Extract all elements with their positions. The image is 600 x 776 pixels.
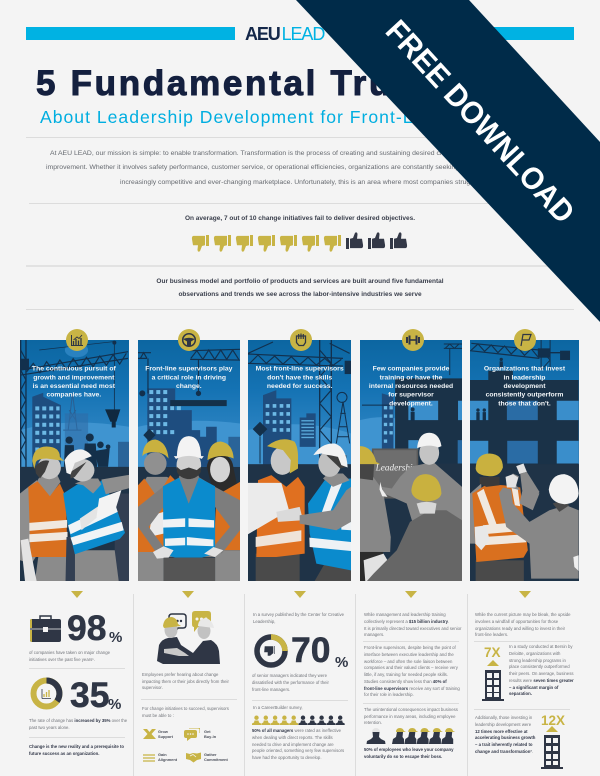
text: 50 percent managers: 50% of all managers were rated as ineffective: [252, 728, 341, 733]
panel 3 caption: don't have the skills: [267, 374, 332, 381]
text: fifteen billion industry: collectively represent a $15 billion industry.: [364, 619, 449, 624]
icon: raised hand badge: [290, 329, 312, 351]
text: upside: involves a windfall of opportunities for those: [475, 619, 558, 624]
text: 50 percent employees: voluntarily do so to escape their boss.: [364, 754, 442, 759]
logo bar: AEU LEAD: [245, 24, 324, 44]
panel 3 caption: Most front-line supervisors: [256, 366, 344, 373]
text: bersin by deloitte: results were seven times greater: [509, 678, 574, 683]
icon: steering wheel badge: [178, 329, 200, 351]
text: 50 percent managers: when dealing with direct reports. The skills: [252, 735, 333, 740]
text: rate of change: past two years alone.: [29, 725, 70, 730]
text: employees prefer: [142, 672, 229, 690]
label: gather commitment: [204, 752, 228, 762]
panel 4 caption: [369, 366, 453, 407]
text: 50 percent managers: people oriented, something very few supervisors: [252, 748, 344, 753]
panel 1 caption: growth and improvement: [33, 374, 115, 381]
text: unintentional consequences: retention.: [364, 720, 382, 725]
text: bersin by deloitte: [509, 644, 574, 698]
text: unintentional consequences: The unintentional consequences impact business: [364, 707, 458, 712]
label: gain alignment: [158, 752, 177, 762]
text: fifteen billion industry: [364, 612, 462, 637]
icon: briefcase: [30, 615, 61, 642]
panel 3: skills needed: [248, 340, 351, 581]
text: senior managers: of senior managers indicated they were: [252, 673, 327, 678]
panel 5 caption: consistently outperform: [486, 392, 563, 399]
icon row: employees leaving: [366, 727, 460, 745]
intro paragraph: At AEU LEAD, our mission is simple: to enable transformation. Transformation is the process of creating and sustaining desired change for continuous: [50, 150, 504, 157]
text: senior managers: [252, 673, 329, 692]
text: companies change: [29, 650, 110, 662]
text: new reality: [29, 744, 124, 756]
text: bersin by deloitte: Deloitte, organizations with: [509, 651, 560, 656]
title: 5 Fundamental Truths: [36, 64, 454, 103]
panel 1 caption: is an essential need most: [33, 383, 116, 390]
ribbon text: FREE DOWNLOAD: [379, 13, 582, 230]
text: front-line supervisors: interface between executive leadership and the: [364, 652, 454, 657]
label: get buy-in: Buy-In: [204, 734, 216, 739]
stat: twelve times with building: [538, 714, 564, 770]
text: employees prefer: impacting them or their jobs directly from their: [142, 679, 229, 684]
panel 5 caption: [484, 366, 566, 407]
text: senior managers: dissatisfied with the performance of their: [252, 680, 329, 685]
panel 1 caption: [32, 366, 116, 399]
business model statement: Our business model and portfolio of products and services are built around five fundamental: [156, 278, 444, 284]
chart: donut 35 percent: [30, 678, 62, 710]
panel 3 caption: [256, 366, 344, 390]
icon: gain alignment: [143, 754, 155, 762]
panel 4 caption: internal resources needed: [369, 383, 453, 390]
label: gather commitment: Commitment: [204, 757, 228, 762]
icon: dumbbell badge: [402, 329, 424, 351]
text: careerbuilder: In a CareerBuilder survey,: [253, 705, 303, 710]
stat: 35 percent: 35: [70, 675, 110, 715]
icon row: ten managers: [252, 716, 345, 725]
panel 5 caption: in leadership: [504, 374, 545, 381]
panel 1 caption: companies have.: [46, 392, 101, 399]
icon: flag badge: [514, 329, 536, 351]
statistic heading: On average, 7 out of 10 change initiatives fail to deliver desired objectives.: [185, 215, 415, 222]
text: unintentional consequences: [364, 707, 458, 727]
text: fifteen billion industry: managers.: [364, 632, 384, 637]
panel 4: training resources: [360, 340, 462, 581]
text: additionally twelve times: change and transformation².: [475, 749, 533, 754]
text: senior managers: front-line managers.: [252, 687, 290, 692]
illustration: supervisor handshake: [157, 611, 220, 664]
panel 5: organizations outperform: [470, 340, 579, 581]
subtitle: About Leadership Development for Front-Line Supervisors: [40, 107, 550, 127]
stat: twelve times with building: 12X: [541, 713, 565, 728]
panel 4 caption: for supervisor: [388, 392, 434, 399]
text: additionally twelve times: leadership development were: [475, 722, 531, 727]
text: additionally twelve times: 12 times more effective at: [475, 728, 528, 734]
text: fifteen billion industry: It is primarily directed toward executives and senior: [364, 626, 461, 630]
text: rate of change: [29, 718, 127, 730]
stat: 98 percent: 98: [67, 608, 106, 648]
text: bersin by deloitte: In a study conducted at Bersin by: [509, 644, 573, 649]
panel 4 caption: training or have the: [380, 374, 443, 381]
text: bersin by deloitte: separation.: [509, 691, 532, 696]
text: upside: front-line leaders.: [475, 632, 508, 637]
text: new reality: future success as an organization.: [29, 751, 99, 756]
text: survey center for creative leadership: Leadership,: [253, 619, 275, 624]
label: gain alignment: Alignment: [158, 757, 177, 762]
label: get buy-in: [204, 729, 216, 739]
intro paragraph: improvement. Whether it involves safety performance, customer service, or operational efficiencies, organizations are constantly seeking to gain an edge in an: [46, 164, 525, 171]
label: gather commitment: Gather: [204, 752, 217, 757]
text: bersin by deloitte: – a significant margin of: [509, 684, 558, 690]
text: fifteen billion industry: While management and leadership training: [364, 612, 446, 617]
panel 4 caption: Few companies provide: [373, 366, 450, 373]
icon: chart badge: [66, 329, 88, 351]
arrows under panels: [71, 591, 531, 598]
text: rate of change: The rate of change has increased by 35% over the: [29, 718, 127, 723]
text: front-line supervisors: [364, 645, 460, 699]
text: additionally twelve times: – a trait inherently related to: [475, 742, 533, 747]
text: front-line supervisors: little, if any, training for needed people skills.: [364, 672, 448, 677]
business model statement: [156, 278, 444, 298]
stat: 70 percent: %: [335, 654, 348, 671]
chart: donut 70 percent: [254, 634, 288, 668]
panel 1: continuous pursuit: [20, 340, 129, 581]
stat: seven times with building: 7X: [484, 645, 501, 660]
text: companies change: of companies have taken on major change: [29, 650, 110, 655]
label: grow support: Grow: [158, 729, 168, 734]
text: additionally twelve times: accelerating business growth: [475, 735, 535, 740]
text: employees prefer: Employees prefer hearing about change: [142, 672, 218, 677]
icon: grow support: [143, 729, 156, 739]
text: 50 percent employees: [364, 747, 454, 761]
text: 50 percent managers: [252, 728, 344, 760]
text: front-line supervisors: for their role in leadership.: [364, 692, 414, 697]
text: companies change: initiatives over the past five years¹.: [29, 657, 95, 662]
text: front-line supervisors: Studies consistently show less than 40% of: [364, 679, 447, 684]
label: grow support: [158, 729, 173, 739]
panel 2 caption: a critical role in driving: [152, 374, 226, 381]
text: 50 percent managers: have had the opportunity to develop.: [252, 755, 322, 760]
text: bersin by deloitte: strong leadership programs in: [509, 658, 566, 662]
thumbs row: [192, 232, 408, 252]
text: bersin by deloitte: their peers. On average, business: [509, 671, 574, 676]
text: for change initiatives: For change initiatives to succeed, supervisors: [142, 706, 229, 711]
label: get buy-in: Get: [204, 729, 210, 734]
text: upside: [475, 612, 571, 639]
text: 50 percent employees: 50% of employees who leave your company: [364, 747, 454, 752]
panel 4 caption: development.: [389, 400, 433, 407]
stat: 35 percent: %: [108, 696, 121, 713]
icon: gather commitment: [186, 752, 201, 762]
icon: get buy-in: [184, 728, 200, 741]
text: 50 percent managers: needed to drive and implement change are: [252, 742, 334, 747]
text: front-line supervisors: Front-line supervisors, despite being the point of: [364, 645, 456, 650]
panel 3 caption: needed for success.: [267, 383, 333, 390]
intro paragraph: [46, 150, 525, 186]
logo bar: [26, 24, 574, 44]
panel 2 caption: Front-line supervisors play: [145, 366, 233, 373]
leadership board word: Leadership: [375, 463, 418, 474]
panel 2 caption: change.: [176, 383, 202, 390]
text: upside: organizations ready and willing to invest in their: [475, 626, 565, 630]
text: front-line supervisors: companies and their valued clients – receive very: [364, 665, 458, 670]
text: bersin by deloitte: place consistently outperformed: [509, 664, 570, 669]
panel 2: front-line supervisors role: [138, 340, 240, 581]
text: unintentional consequences: performance in many areas, including employee: [364, 714, 455, 719]
panel 2 caption: [145, 366, 233, 390]
intro paragraph: increasingly competitive and ever-changing marketplace. Unfortunately, this is an area where most companies struggle.: [120, 179, 481, 186]
stat: 70 percent: [291, 630, 348, 671]
text: front-line supervisors: workforce – and often the sole liaison between: [364, 659, 452, 664]
text: upside: While the current picture may be bleak, the upside: [475, 612, 571, 617]
label: grow support: Support: [158, 734, 173, 739]
text: survey center for creative leadership: In a survey published by the Center for Creative: [253, 612, 344, 617]
text: survey center for creative leadership: [253, 612, 344, 624]
stat: 98 percent: %: [109, 629, 122, 646]
text: front-line supervisors: front-line supervisors receive any sort of training: [364, 686, 460, 691]
text: additionally twelve times: Additionally, those investing in: [475, 715, 532, 720]
text: for change initiatives: [142, 706, 229, 718]
panel 5 caption: development: [504, 383, 546, 390]
stat: seven times with building: [481, 645, 505, 701]
text: employees prefer: supervisor.: [142, 685, 163, 690]
label: gain alignment: Gain: [158, 752, 167, 757]
business model statement: observations and trends we see across the labor-intensive industries we serve: [178, 290, 422, 298]
stat: 70 percent: 70: [291, 630, 330, 670]
panel 5 caption: those that don't.: [498, 400, 551, 407]
panel 5 caption: Organizations that invest: [484, 366, 566, 373]
text: new reality: Change is the new reality and a prerequisite to: [29, 744, 124, 749]
text: additionally twelve times: [475, 715, 535, 756]
panel 1 caption: The continuous pursuit of: [32, 366, 116, 373]
text: for change initiatives: must be able to :: [142, 713, 174, 718]
